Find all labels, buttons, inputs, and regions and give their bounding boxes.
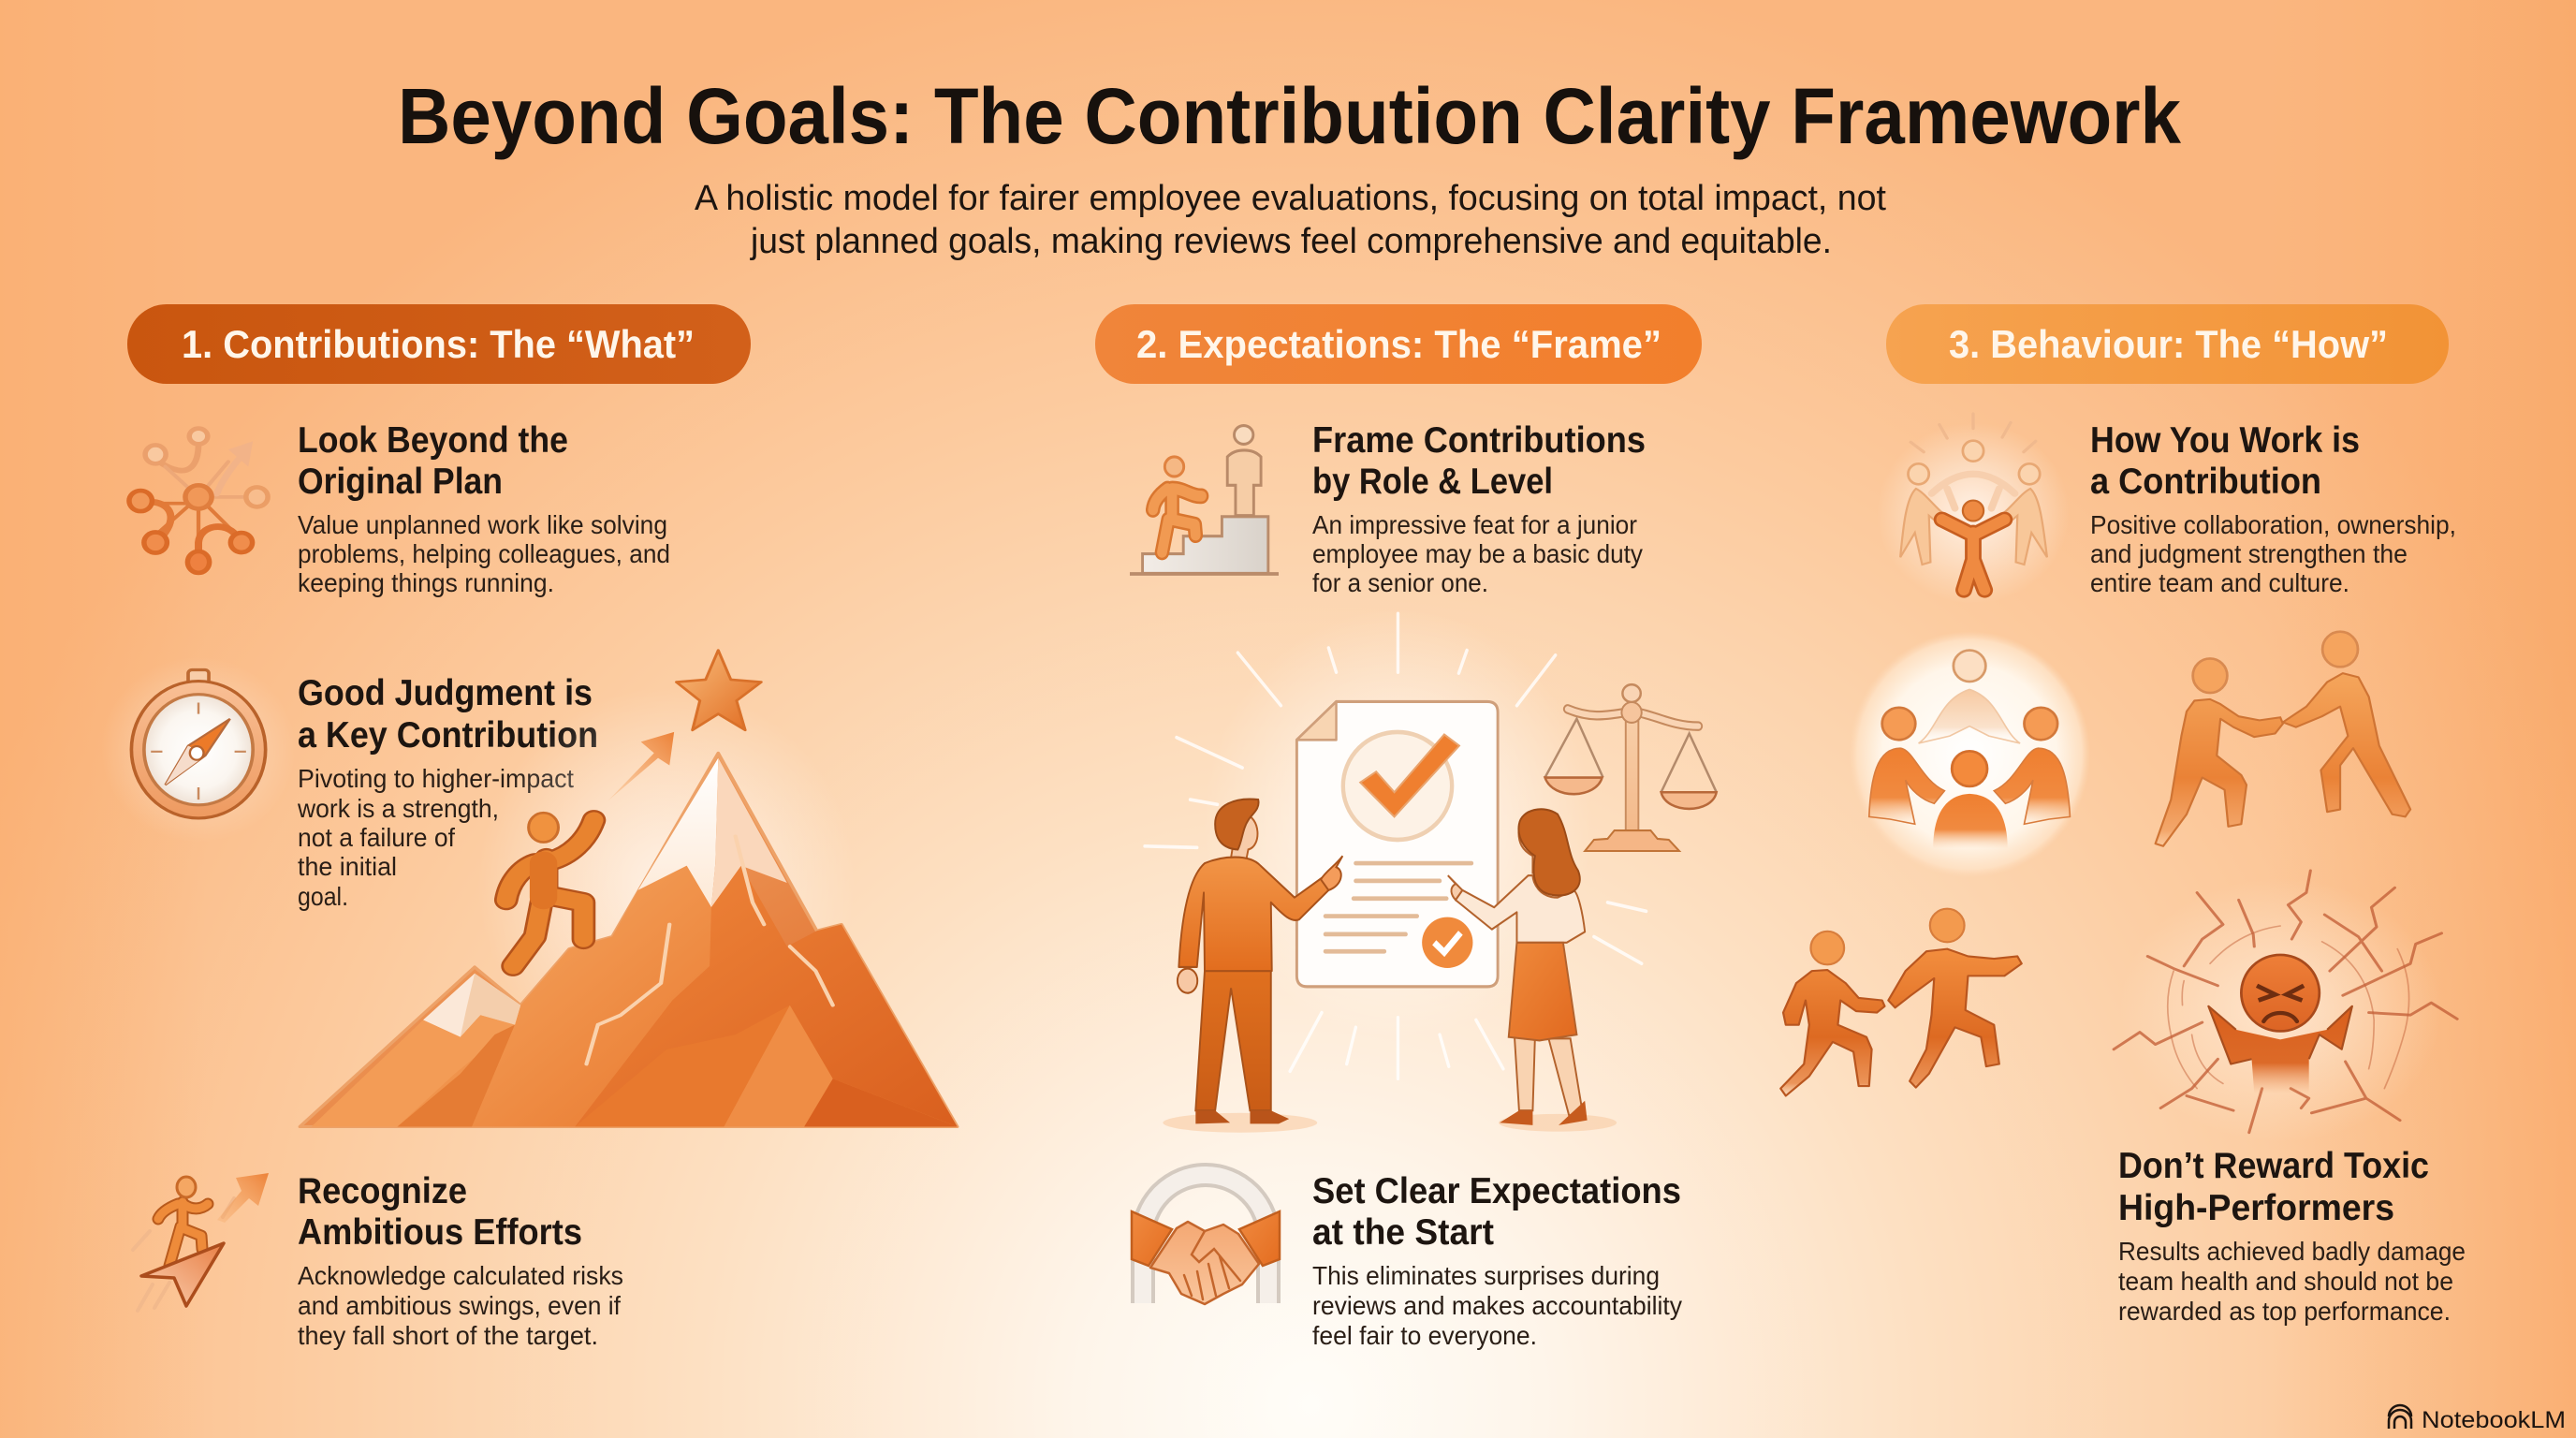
pill heading 2: 2. Expectations: The “Frame” <box>1136 322 1661 366</box>
star <box>677 651 761 730</box>
text: toxic high-performers: team health and should not be <box>2118 1267 2453 1296</box>
text: toxic high-performers: Results achieved badly damage <box>2118 1237 2466 1266</box>
icon: ambitious effort <box>133 1173 269 1311</box>
pill heading 1: 1. Contributions: The “What” <box>182 322 695 366</box>
text: good judgment: a Key Contribution <box>298 715 598 756</box>
subtitle: just planned goals, making reviews feel comprehensive and equitable. <box>750 222 1832 261</box>
text: how you work: and judgment strengthen the <box>2090 539 2408 568</box>
pill heading 1 <box>127 304 751 384</box>
cracks <box>2114 871 2457 1133</box>
illustration: helping hand <box>2156 632 2410 846</box>
icon: team circle small <box>1877 414 2070 604</box>
text: good judgment: Good Judgment is <box>298 673 593 713</box>
text: set clear expectations: This eliminates surprises during <box>1312 1261 1660 1290</box>
text: recognize ambitious efforts: Acknowledge calculated risks <box>298 1261 623 1290</box>
text: good judgment: Pivoting to higher-impact <box>298 764 574 793</box>
pill heading 3: 3. Behaviour: The “How” <box>1949 322 2388 366</box>
illustration: mountain climber <box>300 651 958 1126</box>
text: frame contributions: employee may be a basic duty <box>1312 539 1643 568</box>
subtitle: A holistic model for fairer employee evaluations, focusing on total impact, not <box>695 179 1886 218</box>
text: set clear expectations <box>1312 1171 1682 1350</box>
mountain <box>300 753 958 1126</box>
illustration: running pair <box>1780 909 2022 1096</box>
icon: compass <box>101 656 296 843</box>
text: toxic high-performers: rewarded as top performance. <box>2118 1297 2451 1326</box>
text: look beyond the original plan: problems, helping colleagues, and <box>298 539 670 568</box>
text: good judgment: not a failure of <box>298 823 455 852</box>
text: frame contributions: by Role & Level <box>1312 462 1553 502</box>
text: look beyond the original plan: Original Plan <box>298 462 503 502</box>
text: frame contributions <box>1312 420 1646 597</box>
icon: stairs and levels <box>1130 426 1279 574</box>
text: recognize ambitious efforts: and ambitious swings, even if <box>298 1291 621 1320</box>
man <box>1163 800 1342 1133</box>
text: toxic high-performers: High-Performers <box>2118 1188 2394 1228</box>
illustration: review of contributions <box>1145 609 1717 1133</box>
text: how you work: How You Work is <box>2090 420 2360 461</box>
pill heading 2 <box>1095 304 1702 384</box>
panel: contributions <box>101 304 958 1350</box>
icon: branching network <box>129 429 268 573</box>
title: Beyond Goals: The Contribution Clarity Framework <box>398 72 2181 160</box>
text: frame contributions: for a senior one. <box>1312 568 1488 597</box>
text: good judgment: work is a strength, <box>297 794 499 823</box>
text: recognize ambitious efforts: Ambitious Efforts <box>298 1212 582 1253</box>
text: good judgment: the initial <box>298 852 397 881</box>
text: set clear expectations: reviews and makes accountability <box>1312 1291 1682 1320</box>
NotebookLM mark: NotebookLM <box>2422 1407 2566 1433</box>
document <box>1296 701 1498 987</box>
text: set clear expectations: Set Clear Expectations <box>1312 1171 1681 1211</box>
text: look beyond the original plan: Value unplanned work like solving <box>298 510 667 539</box>
arrow <box>608 732 674 800</box>
text: toxic high-performers: Don’t Reward Toxic <box>2118 1146 2429 1186</box>
panel: expectations <box>1095 304 1717 1350</box>
text: good judgment: goal. <box>298 882 348 911</box>
illustration: team huddle <box>1849 631 2090 878</box>
text: recognize ambitious efforts: they fall short of the target. <box>298 1321 598 1350</box>
text: look beyond the original plan: Look Beyond the <box>298 420 568 461</box>
panel: behaviour <box>1780 304 2466 1326</box>
pill heading 3 <box>1886 304 2449 384</box>
woman <box>1448 809 1617 1132</box>
text: recognize ambitious efforts <box>298 1171 623 1350</box>
text: set clear expectations: at the Start <box>1312 1212 1494 1253</box>
scales of fairness <box>1545 684 1717 851</box>
text: frame contributions: Frame Contributions <box>1312 420 1646 461</box>
text: how you work <box>2090 420 2456 597</box>
illustration: toxic high-performer <box>2114 871 2457 1142</box>
climber figure <box>506 820 593 966</box>
text: how you work: entire team and culture. <box>2090 568 2349 597</box>
text: how you work: a Contribution <box>2090 462 2321 502</box>
text: how you work: Positive collaboration, ownership, <box>2090 510 2456 539</box>
text: toxic high-performers <box>2118 1146 2466 1326</box>
icon: handshake <box>1132 1175 1280 1304</box>
text: look beyond the original plan: keeping things running. <box>298 568 554 597</box>
text: good judgment <box>297 673 598 911</box>
text: set clear expectations: feel fair to everyone. <box>1312 1321 1537 1350</box>
subtitle <box>695 179 1886 261</box>
text: frame contributions: An impressive feat for a junior <box>1312 510 1637 539</box>
text: recognize ambitious efforts: Recognize <box>298 1171 467 1211</box>
text: look beyond the original plan <box>298 420 670 597</box>
